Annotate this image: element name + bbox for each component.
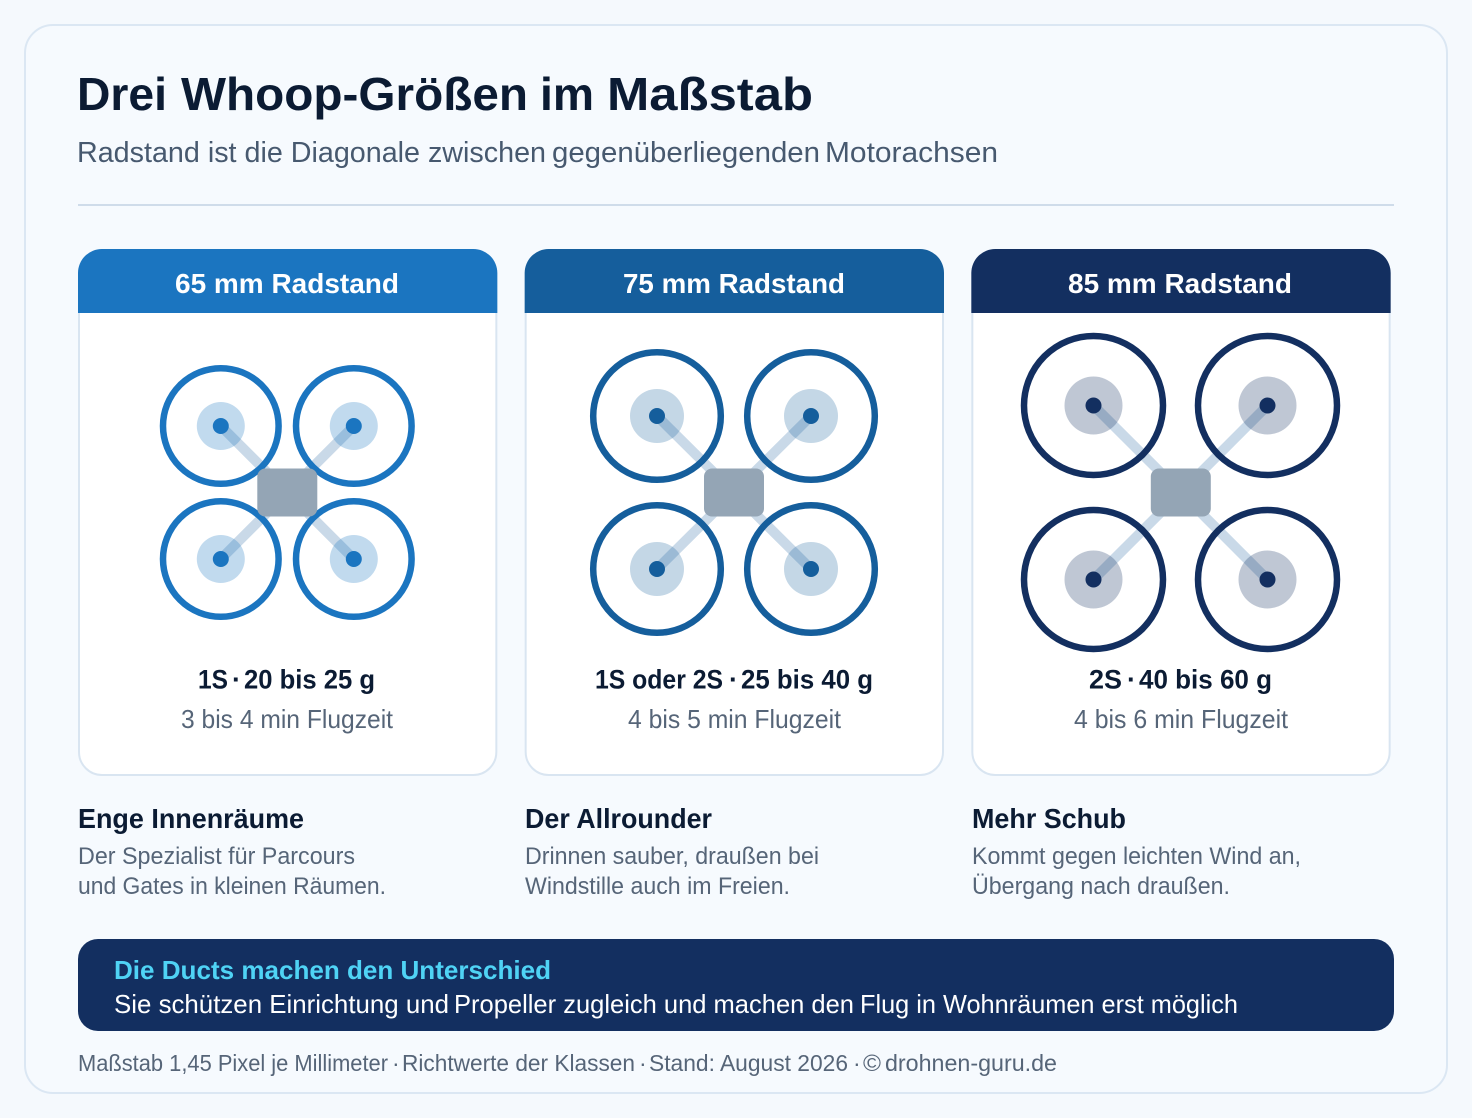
flight time: 4 bis 5 min Flugzeit xyxy=(628,704,842,734)
title: Drei xyxy=(77,68,167,120)
text block: Enge Innenräume: und Gates in kleinen Räumen. xyxy=(78,873,386,900)
panel: 85 mm xyxy=(971,249,1391,775)
text block: Mehr Schub xyxy=(972,803,1301,900)
text block: Enge Innenräume: Enge Innenräume xyxy=(78,803,304,834)
footer note: © xyxy=(863,1050,881,1076)
specs xyxy=(595,664,873,694)
footer note: · xyxy=(392,1050,400,1076)
card body xyxy=(526,250,943,775)
text block: Der Allrounder: Windstille auch im Freien. xyxy=(525,873,790,900)
text block: Mehr Schub: Mehr Schub xyxy=(972,803,1126,834)
text block: Der Allrounder: Der Allrounder xyxy=(525,803,712,834)
text block: Der Allrounder: Drinnen sauber, draußen bei xyxy=(525,843,819,870)
card header: 75 mm Radstand xyxy=(623,268,845,299)
specs: 25 bis 40 g xyxy=(741,664,873,694)
drone diagram 65 mm xyxy=(163,368,412,617)
drone diagram 85 mm xyxy=(1024,336,1337,649)
footer note: drohnen-guru.de xyxy=(885,1050,1057,1076)
footer note: Maßstab 1,45 Pixel je Millimeter xyxy=(78,1050,388,1076)
callout banner xyxy=(78,939,1394,1031)
specs: 40 bis 60 g xyxy=(1139,664,1272,694)
callout banner: Flug in Wohnräumen erst möglich xyxy=(860,989,1238,1019)
footer note: Richtwerte der Klassen xyxy=(402,1050,635,1076)
text block: Mehr Schub: Übergang nach draußen. xyxy=(972,873,1230,900)
subtitle: Motorachsen xyxy=(825,137,998,169)
subtitle: gegenüberliegenden xyxy=(552,137,820,169)
text block: Enge Innenräume: Der Spezialist für Parcours xyxy=(78,843,355,870)
drone diagram 75 mm xyxy=(593,352,875,633)
specs: 1S xyxy=(198,664,228,694)
specs: 1S oder 2S xyxy=(595,664,723,694)
card header xyxy=(78,249,497,313)
footer note: · xyxy=(639,1050,647,1076)
flight time: 3 bis 4 min Flugzeit xyxy=(181,704,394,734)
specs: · xyxy=(232,664,241,694)
text block: Der Allrounder xyxy=(525,803,819,900)
footer note xyxy=(78,1050,1057,1076)
card body xyxy=(972,250,1390,775)
footer note: Stand: August 2026 xyxy=(649,1050,848,1076)
text block: Enge Innenräume xyxy=(78,803,386,900)
card header xyxy=(971,249,1391,313)
flight time: 4 bis 6 min Flugzeit xyxy=(1074,704,1289,734)
footer note: · xyxy=(853,1050,861,1076)
card header: 85 mm Radstand xyxy=(1068,268,1292,299)
title: im xyxy=(540,68,594,120)
title xyxy=(77,68,813,120)
specs: 20 bis 25 g xyxy=(244,664,375,694)
specs: · xyxy=(729,664,738,694)
card header xyxy=(525,249,944,313)
specs: 2S xyxy=(1089,664,1122,694)
panel: 65 mm xyxy=(78,249,497,775)
card header: 65 mm Radstand xyxy=(175,268,399,299)
callout banner: Die Ducts machen den Unterschied xyxy=(114,955,551,985)
subtitle: Radstand ist die Diagonale zwischen xyxy=(77,137,546,169)
text block: Mehr Schub: Kommt gegen leichten Wind an, xyxy=(972,843,1301,870)
title: Maßstab xyxy=(607,68,813,120)
callout banner: Propeller zugleich und machen den xyxy=(454,989,854,1019)
title: Whoop-Größen xyxy=(181,68,528,120)
callout banner: Sie schützen Einrichtung und xyxy=(114,989,449,1019)
panel: 75 mm xyxy=(525,249,944,775)
card body xyxy=(79,250,496,775)
specs: · xyxy=(1127,664,1136,694)
subtitle xyxy=(77,137,998,169)
